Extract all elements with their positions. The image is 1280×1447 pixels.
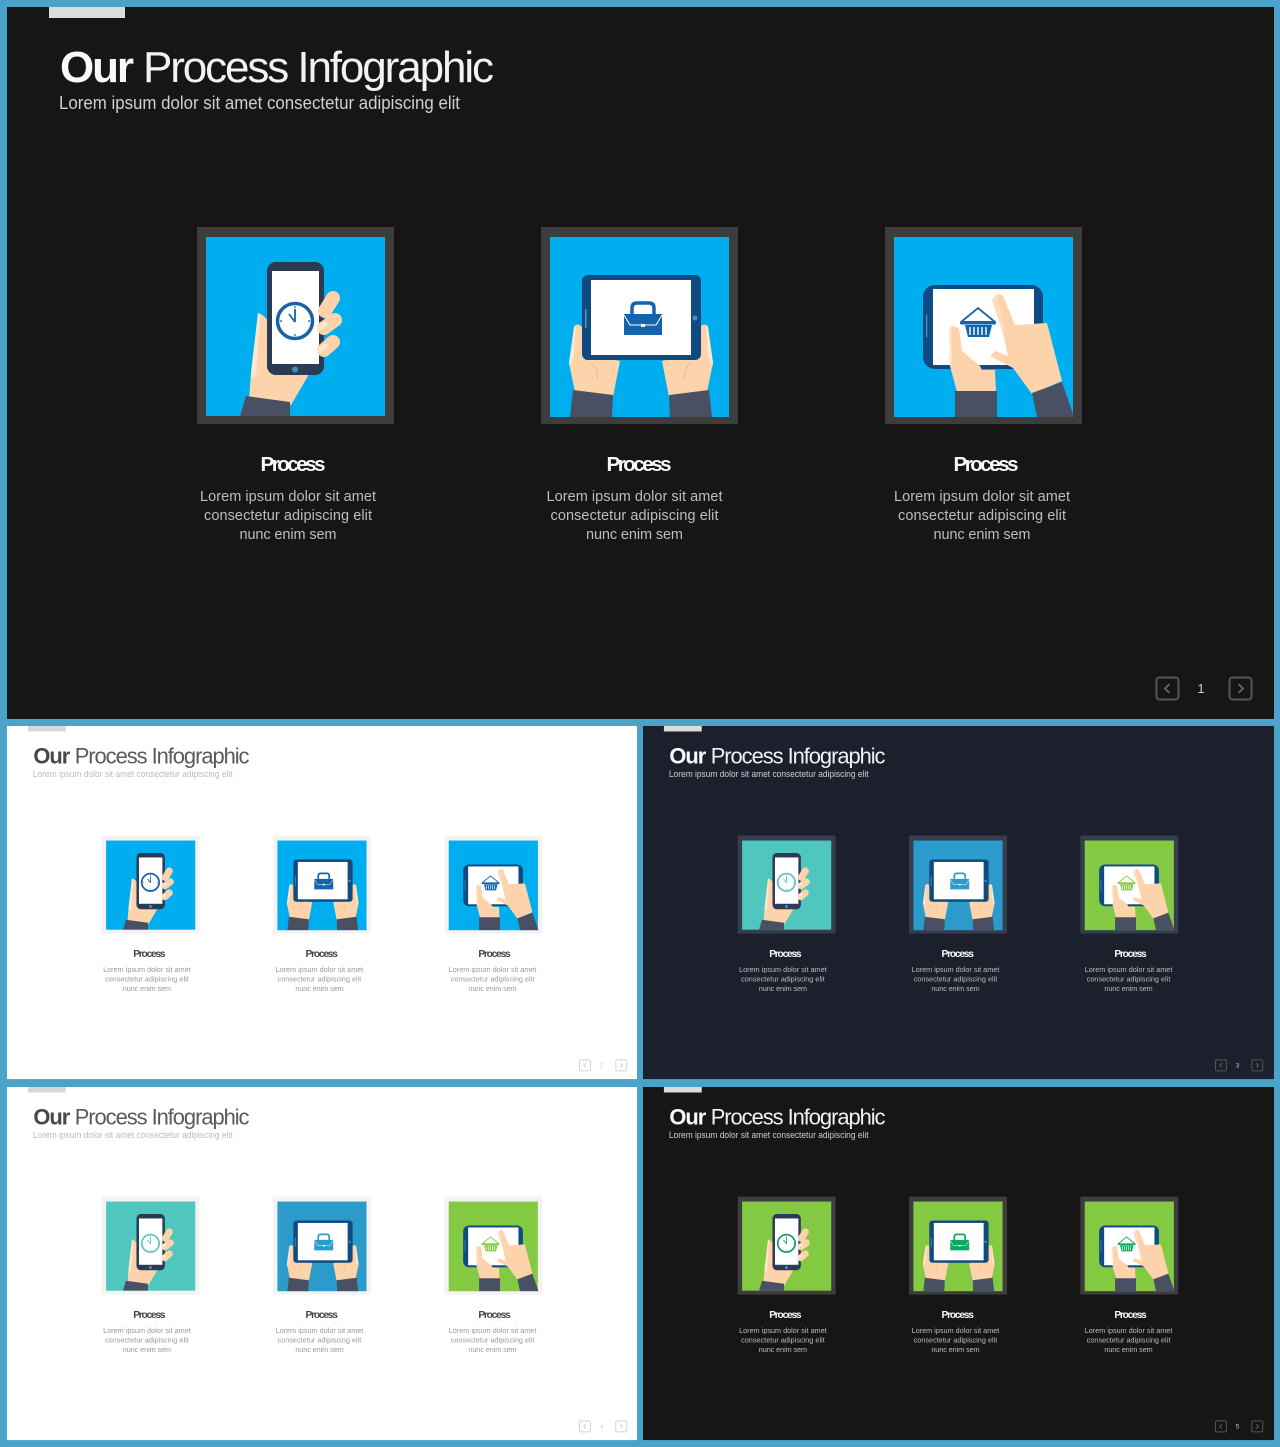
process text 3: nunc enim sem — [934, 527, 1030, 543]
process text 2: nunc enim sem — [586, 527, 683, 543]
process text 3 — [1085, 1310, 1172, 1354]
process text 3: consectetur adipiscing elit — [451, 1335, 534, 1344]
process text 2: Process — [606, 453, 672, 476]
icon: phone with clock — [738, 836, 836, 934]
process text 3: nunc enim sem — [1104, 984, 1153, 993]
process text 2 — [276, 1310, 363, 1354]
process text 3: consectetur adipiscing elit — [898, 508, 1066, 524]
process text 1: consectetur adipiscing elit — [105, 974, 189, 983]
process text 3: Lorem ipsum dolor sit amet — [894, 489, 1070, 505]
icon: phone with clock — [102, 836, 200, 934]
process text 2 — [276, 949, 363, 993]
process text 3 — [894, 453, 1070, 543]
icon: tablet with briefcase — [909, 836, 1007, 934]
process text 2 — [912, 1310, 999, 1354]
process text 2: Process — [942, 949, 974, 960]
process text 1: Lorem ipsum dolor sit amet — [200, 489, 376, 505]
icon: phone with clock — [738, 1197, 836, 1295]
title: Our — [33, 1104, 71, 1129]
pagination: 5 — [1236, 1424, 1240, 1431]
icon: phone with clock — [197, 227, 394, 424]
process text 3: Process — [1114, 949, 1147, 960]
icon: phone with clock — [102, 1197, 200, 1295]
process text 1: consectetur adipiscing elit — [741, 1335, 825, 1344]
panel: white slide, blue icons — [7, 726, 637, 1079]
process text 2: Process — [306, 1310, 338, 1321]
process text 1 — [103, 949, 191, 993]
process text 2 — [912, 949, 999, 993]
process text 2: Process — [942, 1310, 974, 1321]
process text 3: nunc enim sem — [468, 1345, 517, 1354]
process text 2: Lorem ipsum dolor sit amet — [912, 1326, 999, 1335]
process text 3: consectetur adipiscing elit — [1087, 1335, 1170, 1344]
process text 2: consectetur adipiscing elit — [278, 1335, 361, 1344]
icon: tablet with basket — [1080, 1197, 1178, 1295]
process text 2: consectetur adipiscing elit — [914, 974, 997, 983]
process text 2: Lorem ipsum dolor sit amet — [912, 965, 999, 974]
process text 1: Process — [769, 949, 802, 960]
icon: tablet with briefcase — [273, 1197, 371, 1295]
icon: tablet with basket — [444, 1197, 542, 1295]
title tab — [49, 7, 125, 18]
icon: tablet with basket — [1080, 836, 1178, 934]
icon: tablet with basket — [885, 227, 1082, 424]
process text 2: Lorem ipsum dolor sit amet — [546, 489, 722, 505]
panel: navy slide, multicolour icons — [643, 726, 1274, 1079]
process text 1: nunc enim sem — [123, 1345, 171, 1354]
pagination: 2 — [600, 1063, 604, 1070]
process text 1 — [200, 453, 376, 543]
icon: tablet with briefcase — [541, 227, 738, 424]
process text 3: Process — [1114, 1310, 1147, 1321]
process text 2: consectetur adipiscing elit — [278, 974, 361, 983]
process text 3: Lorem ipsum dolor sit amet — [1085, 1326, 1172, 1335]
process text 1 — [103, 1310, 191, 1354]
title: Our — [669, 1104, 707, 1129]
panel: black slide, green icons — [643, 1087, 1274, 1440]
title tab — [28, 1087, 66, 1092]
pagination — [579, 1060, 627, 1071]
pagination: 4 — [600, 1424, 604, 1431]
process text 1: consectetur adipiscing elit — [105, 1335, 189, 1344]
process text 1: consectetur adipiscing elit — [204, 508, 372, 524]
process text 1: consectetur adipiscing elit — [741, 974, 825, 983]
process text 3: nunc enim sem — [1104, 1345, 1153, 1354]
icon: tablet with briefcase — [909, 1197, 1007, 1295]
title tab — [28, 726, 66, 731]
process text 1 — [739, 1310, 827, 1354]
process text 1: nunc enim sem — [759, 1345, 807, 1354]
process text 2: nunc enim sem — [295, 984, 344, 993]
icon: tablet with briefcase — [273, 836, 371, 934]
process text 1: Process — [133, 1310, 166, 1321]
pagination — [1215, 1060, 1263, 1071]
process text 3: consectetur adipiscing elit — [1087, 974, 1170, 983]
title: Our — [60, 43, 134, 92]
process text 2: nunc enim sem — [931, 1345, 980, 1354]
process text 1: Lorem ipsum dolor sit amet — [739, 1326, 827, 1335]
title tab — [664, 1087, 702, 1092]
process text 3: Lorem ipsum dolor sit amet — [449, 1326, 536, 1335]
process text 1: nunc enim sem — [759, 984, 807, 993]
pagination — [1215, 1421, 1263, 1432]
process text 2: Lorem ipsum dolor sit amet — [276, 1326, 363, 1335]
process text 2: Process — [306, 949, 338, 960]
process text 2: consectetur adipiscing elit — [550, 508, 718, 524]
subtitle: Lorem ipsum dolor sit amet consectetur adipiscing elit — [33, 769, 233, 779]
subtitle: Lorem ipsum dolor sit amet consectetur adipiscing elit — [59, 93, 460, 113]
process text 1: Lorem ipsum dolor sit amet — [103, 965, 191, 974]
process text 1: Process — [769, 1310, 802, 1321]
pagination: 3 — [1236, 1063, 1240, 1070]
title: Process Infographic — [143, 43, 494, 92]
process text 3: nunc enim sem — [468, 984, 517, 993]
process text 3 — [1085, 949, 1172, 993]
icon: tablet with basket — [444, 836, 542, 934]
title: Our — [33, 743, 71, 768]
panel: white slide, multicolour icons — [7, 1087, 637, 1440]
process text 3 — [449, 949, 536, 993]
process text 1: Process — [133, 949, 166, 960]
pagination: 1 — [1197, 681, 1205, 696]
process text 1: Lorem ipsum dolor sit amet — [739, 965, 827, 974]
title tab — [664, 726, 702, 731]
title: Process Infographic — [711, 743, 886, 768]
title: Process Infographic — [75, 743, 250, 768]
process text 2: consectetur adipiscing elit — [914, 1335, 997, 1344]
process text 2: nunc enim sem — [295, 1345, 344, 1354]
process text 2: nunc enim sem — [931, 984, 980, 993]
process text 3: Process — [954, 453, 1018, 476]
process text 2: Lorem ipsum dolor sit amet — [276, 965, 363, 974]
pagination — [579, 1421, 627, 1432]
process text 3 — [449, 1310, 536, 1354]
panel: main dark slide — [7, 7, 1274, 719]
process text 3: Lorem ipsum dolor sit amet — [1085, 965, 1172, 974]
process text 3: consectetur adipiscing elit — [451, 974, 534, 983]
process text 2 — [546, 453, 722, 543]
process text 3: Lorem ipsum dolor sit amet — [449, 965, 536, 974]
process text 3: Process — [478, 1310, 511, 1321]
process text 1 — [739, 949, 827, 993]
title: Process Infographic — [711, 1104, 886, 1129]
subtitle: Lorem ipsum dolor sit amet consectetur adipiscing elit — [33, 1130, 233, 1140]
subtitle: Lorem ipsum dolor sit amet consectetur adipiscing elit — [669, 1130, 869, 1140]
process text 1: Lorem ipsum dolor sit amet — [103, 1326, 191, 1335]
title: Process Infographic — [75, 1104, 250, 1129]
pagination — [1156, 678, 1252, 700]
subtitle: Lorem ipsum dolor sit amet consectetur adipiscing elit — [669, 769, 869, 779]
process text 3: Process — [478, 949, 511, 960]
process text 1: nunc enim sem — [123, 984, 171, 993]
process text 1: Process — [260, 453, 326, 476]
process text 1: nunc enim sem — [240, 527, 336, 543]
title: Our — [669, 743, 707, 768]
